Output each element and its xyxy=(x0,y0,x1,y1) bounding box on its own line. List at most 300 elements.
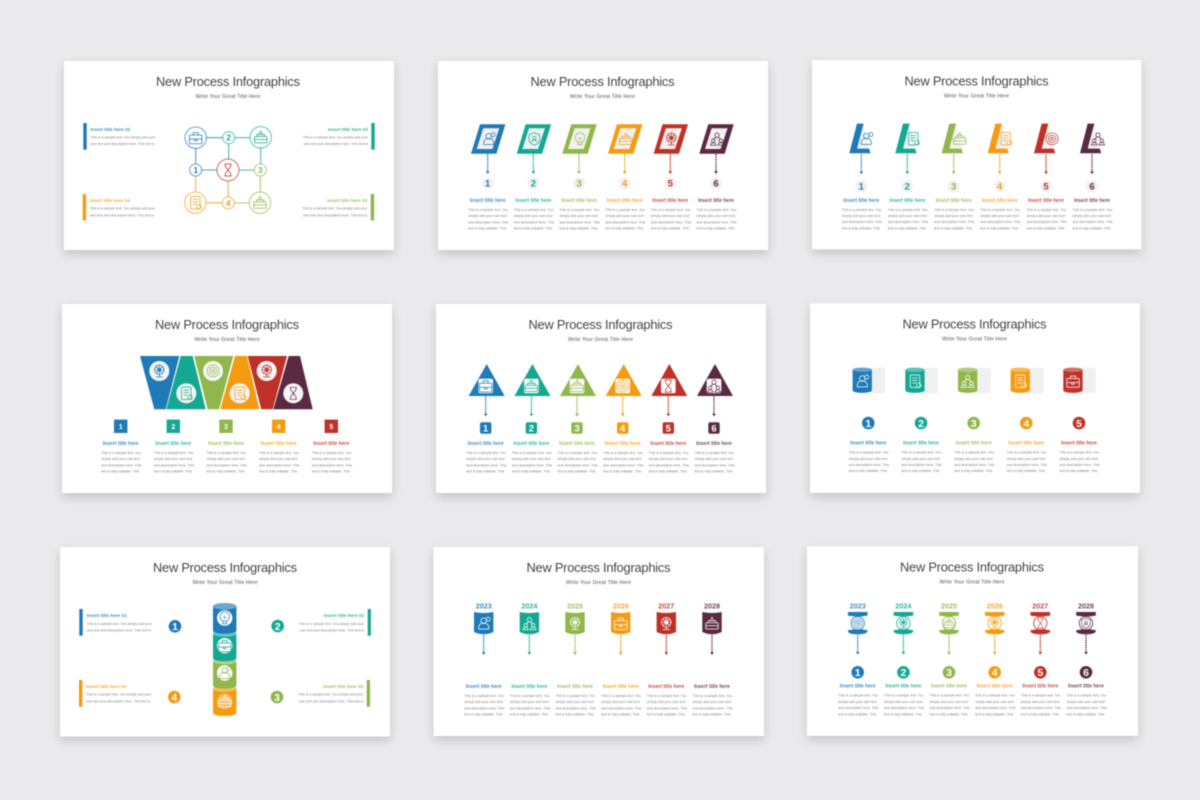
text block: simply add your own text xyxy=(510,700,548,704)
text block: text is fully editable. This xyxy=(1066,712,1105,716)
text block: text is fully editable. This xyxy=(849,469,887,473)
text block: and description here. This xyxy=(514,220,554,224)
text block: Insert title here xyxy=(885,684,922,690)
text block: text is fully editable. This xyxy=(842,226,880,230)
number circle: 5 xyxy=(1076,418,1082,430)
number node 3: 3 xyxy=(258,165,263,175)
step 3 xyxy=(206,420,247,474)
year: 2025 xyxy=(567,602,583,611)
text block: simply add your own text xyxy=(560,214,598,218)
text block: This is a sample text. You xyxy=(259,451,299,455)
icon: target xyxy=(853,618,862,628)
text block: This is a sample text. You xyxy=(696,208,736,212)
callout 01: This is a sample text. You simply add your xyxy=(87,622,153,626)
subtitle: Write Your Great Title Here xyxy=(944,93,1009,99)
arrow xyxy=(952,154,956,174)
text block: and description here. This xyxy=(154,463,194,467)
text block xyxy=(312,441,352,474)
step 1 xyxy=(101,420,142,474)
arrow xyxy=(621,396,624,416)
arrow xyxy=(668,154,672,174)
text block xyxy=(930,684,970,716)
text block: simply add your own text xyxy=(884,700,922,704)
arrow xyxy=(712,396,716,416)
text block xyxy=(101,441,142,474)
icon: hourglass xyxy=(1037,618,1043,628)
text block: and description here. This xyxy=(1026,220,1067,224)
number: 1 xyxy=(485,179,491,190)
callout 02: Insert title here 02 xyxy=(324,613,364,618)
arrow xyxy=(664,635,668,655)
number 3: 3 xyxy=(274,692,280,704)
text block: Insert title here xyxy=(1061,441,1097,447)
number square: 4 xyxy=(277,424,281,431)
arrow xyxy=(1084,635,1088,655)
text block: This is a sample text. You xyxy=(466,451,506,455)
step 5 xyxy=(1026,124,1067,230)
text block: simply add your own text xyxy=(1026,214,1065,218)
text block xyxy=(842,198,882,230)
callout 03 xyxy=(302,194,374,220)
year: 2024 xyxy=(521,602,537,611)
number 2 xyxy=(271,620,284,633)
text block: Insert title here xyxy=(559,441,595,447)
text block xyxy=(1021,684,1061,716)
arrow xyxy=(860,154,863,174)
trapezoid 4 xyxy=(220,356,259,409)
text block: text is fully editable. This xyxy=(605,227,644,231)
text block: simply add your own text xyxy=(692,700,731,704)
node: centre hourglass xyxy=(217,159,239,181)
text block: text is fully editable. This xyxy=(466,470,505,474)
number node 1: 1 xyxy=(193,165,198,175)
number square: 2 xyxy=(529,423,534,434)
number square: 2 xyxy=(171,424,175,431)
text block: simply add your own text xyxy=(605,214,644,218)
icon: person xyxy=(861,133,873,144)
step 1 xyxy=(838,601,879,716)
callout 02: own text and description here. This text is xyxy=(304,142,368,146)
text block: simply add your own text xyxy=(647,700,685,704)
parallelogram frame xyxy=(562,124,597,154)
icon: person xyxy=(484,133,495,145)
step 5 xyxy=(1021,601,1061,716)
text block: This is a sample text. You xyxy=(603,451,643,455)
text block: This is a sample text. You xyxy=(954,451,994,455)
text block: and description here. This xyxy=(692,706,733,710)
callout 03: Insert title here 03 xyxy=(323,684,364,689)
subtitle: Write Your Great Title Here xyxy=(192,580,258,586)
text block: text is fully editable. This xyxy=(692,713,731,717)
text block: simply add your own text xyxy=(1072,214,1111,218)
callout 04: Insert title here 04 xyxy=(86,684,127,689)
text block xyxy=(560,198,600,231)
parallelogram frame xyxy=(654,124,688,154)
text block xyxy=(692,684,733,717)
arrow xyxy=(623,154,626,174)
arrow xyxy=(710,635,714,655)
callout 04: Insert title here 04 xyxy=(90,198,130,203)
text block: and description here. This xyxy=(1060,463,1100,467)
arrow xyxy=(906,154,909,174)
text block xyxy=(556,684,596,717)
step 3 xyxy=(556,602,596,717)
subtitle: Write Your Great Title Here xyxy=(568,337,633,343)
text block: text is fully editable. This xyxy=(206,470,245,474)
text block: This is a sample text. You xyxy=(1072,208,1112,212)
text block: simply add your own text xyxy=(651,214,689,218)
text block xyxy=(647,684,687,717)
text block: simply add your own text xyxy=(154,457,192,461)
number node 4: 4 xyxy=(226,198,231,208)
number 2: 2 xyxy=(275,621,281,633)
text block: and description here. This xyxy=(884,706,924,710)
text block: Insert title here xyxy=(843,198,879,204)
text block: Insert title here xyxy=(605,441,641,447)
arrow xyxy=(528,635,531,655)
text block: This is a sample text. You xyxy=(980,208,1020,212)
step 5 xyxy=(649,364,689,474)
text block: simply add your own text xyxy=(888,214,926,218)
text block: text is fully editable. This xyxy=(560,227,598,231)
text block: This is a sample text. You xyxy=(1060,451,1099,455)
text block: This is a sample text. You xyxy=(934,208,974,212)
number 3 xyxy=(271,691,283,704)
icon: document xyxy=(910,375,921,388)
pin shape xyxy=(848,612,868,634)
text block: text is fully editable. This xyxy=(647,713,685,717)
icon: shield xyxy=(1082,618,1090,628)
text block: simply add your own text xyxy=(1060,457,1098,461)
text block: Insert title here xyxy=(850,441,886,447)
text block: and description here. This xyxy=(1021,706,1061,710)
callout 03 xyxy=(298,680,370,707)
text block: This is a sample text. You xyxy=(1066,694,1106,698)
text block: Insert title here xyxy=(607,198,643,204)
icon: wheel xyxy=(991,618,999,628)
number: 1 xyxy=(859,182,865,193)
L-shaped marker xyxy=(895,124,917,153)
text block: and description here. This xyxy=(601,706,642,710)
text block: Insert title here xyxy=(313,441,349,447)
text block: Insert title here xyxy=(650,441,686,447)
text block: and description here. This xyxy=(206,463,247,467)
year: 2027 xyxy=(658,602,674,611)
card background xyxy=(812,60,1142,249)
text block: and description here. This xyxy=(647,706,687,710)
slide 5: triangle steps xyxy=(436,304,766,493)
text block xyxy=(468,198,509,231)
year: 2028 xyxy=(704,602,720,611)
tag shape xyxy=(611,612,630,634)
text block: This is a sample text. You xyxy=(1007,451,1047,455)
icon: briefcase xyxy=(479,381,492,392)
L-shaped marker xyxy=(1034,124,1055,153)
triangle marker xyxy=(651,364,687,396)
text block: and description here. This xyxy=(954,463,995,467)
text block: simply add your own text xyxy=(601,700,640,704)
step 4 xyxy=(1007,368,1047,473)
number circle: 6 xyxy=(1083,667,1089,679)
step 3 xyxy=(930,601,970,716)
L-shaped marker xyxy=(849,124,871,153)
text block: and description here. This xyxy=(1072,220,1113,224)
arrow xyxy=(998,154,1002,174)
number square: 6 xyxy=(711,423,717,434)
segment 3 xyxy=(213,658,236,689)
text block: This is a sample text. You xyxy=(558,451,597,455)
text block: and description here. This xyxy=(259,463,300,467)
icon: package xyxy=(571,380,583,392)
icon: box xyxy=(619,133,632,144)
arrow xyxy=(573,635,577,655)
text block: Insert title here xyxy=(470,198,506,204)
step 5 xyxy=(312,420,352,474)
step 3 xyxy=(954,368,995,473)
icon: people xyxy=(710,133,724,145)
text block xyxy=(902,441,942,473)
text block: and description here. This xyxy=(694,463,735,467)
step 4 xyxy=(259,420,300,474)
triangle marker xyxy=(514,364,550,396)
text block: Insert title here xyxy=(561,198,597,204)
cylinder xyxy=(905,368,938,393)
text block xyxy=(464,684,505,717)
icon: people pyramid xyxy=(1092,133,1104,145)
subtitle: Write Your Great Title Here xyxy=(570,94,635,100)
number circle: 5 xyxy=(1037,667,1043,679)
text block xyxy=(694,441,735,474)
text block xyxy=(1060,441,1100,473)
cylinder xyxy=(853,368,885,393)
card background xyxy=(810,303,1140,493)
text block: This is a sample text. You xyxy=(605,208,645,212)
year: 2026 xyxy=(987,601,1003,610)
icon: target xyxy=(1046,133,1058,145)
text block: This is a sample text. You xyxy=(838,694,878,698)
text block: This is a sample text. You xyxy=(1026,208,1066,212)
number: 3 xyxy=(576,179,582,190)
step 2 xyxy=(154,420,194,474)
step 5 xyxy=(647,602,687,717)
number: 6 xyxy=(1089,182,1095,193)
text block: Insert title here xyxy=(1028,198,1064,204)
cylinder xyxy=(958,368,991,393)
text block: and description here. This xyxy=(468,220,509,224)
text block: and description here. This xyxy=(466,463,507,467)
number circle: 2 xyxy=(900,667,906,679)
callout 04: This is a sample text. You simply add your xyxy=(90,207,156,211)
text block xyxy=(603,441,644,474)
number circle: 3 xyxy=(946,667,952,679)
text block: text is fully editable. This xyxy=(649,470,687,474)
text block: and description here. This xyxy=(975,706,1016,710)
text block: text is fully editable. This xyxy=(514,227,552,231)
tag shape xyxy=(702,612,722,634)
text block: simply add your own text xyxy=(1066,700,1105,704)
number 1 xyxy=(169,620,181,633)
text block: simply add your own text xyxy=(514,214,552,218)
callout 03: This is a sample text. You simply add your xyxy=(298,693,364,697)
number: 5 xyxy=(1043,182,1049,193)
icon: wheel xyxy=(666,133,676,145)
step 6 xyxy=(692,602,733,717)
arrow xyxy=(486,154,490,174)
text block: Insert title here xyxy=(515,198,552,204)
text block: and description here. This xyxy=(980,220,1021,224)
number: 2 xyxy=(531,179,536,190)
text block: and description here. This xyxy=(651,220,691,224)
text block: simply add your own text xyxy=(259,457,298,461)
text block: text is fully editable. This xyxy=(1021,712,1059,716)
step 2 xyxy=(902,368,942,473)
title: New Process Infographics xyxy=(904,73,1048,88)
slide 7: stacked cylinder xyxy=(60,547,390,736)
text block xyxy=(1066,684,1107,716)
number node 2 xyxy=(223,132,235,144)
cylinder xyxy=(1011,368,1043,393)
callout 01: own text and description here. This text is xyxy=(90,142,155,146)
node: bottom-left icon xyxy=(185,192,206,213)
number 4: 4 xyxy=(171,692,177,704)
text block: Insert title here xyxy=(1068,684,1104,690)
text block: Insert title here xyxy=(511,684,548,690)
step 1 xyxy=(468,124,509,231)
text block xyxy=(206,441,247,474)
text block xyxy=(954,441,995,473)
step 5 xyxy=(1060,368,1100,473)
text block xyxy=(514,198,554,231)
text block xyxy=(696,198,737,231)
triangle marker xyxy=(469,364,505,396)
text block: This is a sample text. You xyxy=(601,694,641,698)
callout 02 xyxy=(299,609,371,636)
icon: shield xyxy=(529,133,540,145)
text block: and description here. This xyxy=(1007,463,1047,467)
number node 2: 2 xyxy=(226,133,231,143)
text block: This is a sample text. You xyxy=(647,694,687,698)
callout 04 xyxy=(79,680,152,707)
segment 2 xyxy=(213,631,236,661)
callout 02: own text and description here. This text is xyxy=(300,628,364,632)
text block: simply add your own text xyxy=(849,457,887,461)
text block: This is a sample text. You xyxy=(651,208,691,212)
text block: simply add your own text xyxy=(468,214,507,218)
number circle: 2 xyxy=(918,418,924,430)
slide 6: cylinder steps xyxy=(810,303,1140,493)
text block: and description here. This xyxy=(849,463,889,467)
title: New Process Infographics xyxy=(902,316,1046,331)
text block: This is a sample text. You xyxy=(512,451,552,455)
icon: wheel xyxy=(900,618,907,628)
pin shape xyxy=(939,612,959,634)
cylinder xyxy=(1063,368,1096,393)
subtitle: Write Your Great Title Here xyxy=(942,336,1007,342)
year: 2023 xyxy=(476,602,492,611)
text block xyxy=(259,441,300,474)
text block: and description here. This xyxy=(888,220,928,224)
text block: text is fully editable. This xyxy=(934,226,973,230)
text block xyxy=(1007,441,1047,473)
text block: Insert title here xyxy=(903,441,939,447)
text block: This is a sample text. You xyxy=(468,208,508,212)
step 4 xyxy=(975,601,1016,716)
title: New Process Infographics xyxy=(156,74,300,89)
subtitle: Write Your Great Title Here xyxy=(566,580,631,586)
callout 04 xyxy=(83,194,156,220)
step 4 xyxy=(605,124,646,231)
text block: This is a sample text. You xyxy=(888,208,928,212)
number: 5 xyxy=(668,179,674,190)
callout 02 xyxy=(303,123,375,150)
pin shape xyxy=(985,612,1004,634)
text block: text is fully editable. This xyxy=(980,226,1019,230)
icon: briefcase xyxy=(1067,376,1079,387)
parallelogram frame xyxy=(608,124,642,154)
arrow xyxy=(666,396,670,416)
text block: simply add your own text xyxy=(312,457,350,461)
icon: people xyxy=(479,617,490,629)
trapezoid 2 xyxy=(166,356,206,409)
text block: Insert title here xyxy=(982,198,1018,204)
text block xyxy=(980,198,1021,230)
callout 03: This is a sample text. You simply add your xyxy=(302,207,368,211)
text block: text is fully editable. This xyxy=(512,470,550,474)
text block: and description here. This xyxy=(312,463,352,467)
step 3 xyxy=(558,364,598,474)
callout 01: own text and description here. This text is xyxy=(87,628,151,632)
icon: hourglass xyxy=(665,380,672,392)
L-shaped marker xyxy=(1080,124,1101,153)
year: 2025 xyxy=(941,601,957,610)
text block: simply add your own text xyxy=(930,700,968,704)
text block: This is a sample text. You xyxy=(849,451,889,455)
number: 4 xyxy=(997,182,1003,193)
text block: simply add your own text xyxy=(902,457,940,461)
text block xyxy=(888,198,928,230)
text block: simply add your own text xyxy=(556,700,594,704)
text block: This is a sample text. You xyxy=(154,451,194,455)
text block: and description here. This xyxy=(649,463,689,467)
text block: simply add your own text xyxy=(694,457,733,461)
text block: simply add your own text xyxy=(603,457,642,461)
text block: This is a sample text. You xyxy=(312,451,352,455)
text block: This is a sample text. You xyxy=(930,694,969,698)
text block: simply add your own text xyxy=(649,457,687,461)
grid connector lines xyxy=(196,138,261,203)
icon: person xyxy=(857,375,869,387)
text block: This is a sample text. You xyxy=(510,694,550,698)
text block xyxy=(975,684,1016,716)
trapezoid 6 xyxy=(273,356,313,409)
number circle: 4 xyxy=(1023,418,1029,430)
callout 02: Insert title here 02 xyxy=(328,127,368,132)
node: top-left icon xyxy=(185,127,206,148)
number square: 5 xyxy=(329,424,333,431)
text block: simply add your own text xyxy=(1021,700,1059,704)
number: 3 xyxy=(951,182,956,193)
pin shape xyxy=(1030,612,1050,634)
text block: simply add your own text xyxy=(838,700,877,704)
text block: simply add your own text xyxy=(842,214,880,218)
card background xyxy=(807,546,1138,736)
text block: text is fully editable. This xyxy=(651,227,689,231)
text block xyxy=(934,198,975,230)
arrow xyxy=(575,396,579,416)
icon: document xyxy=(1001,133,1012,145)
card background xyxy=(434,547,764,736)
parallelogram frame xyxy=(517,124,551,154)
